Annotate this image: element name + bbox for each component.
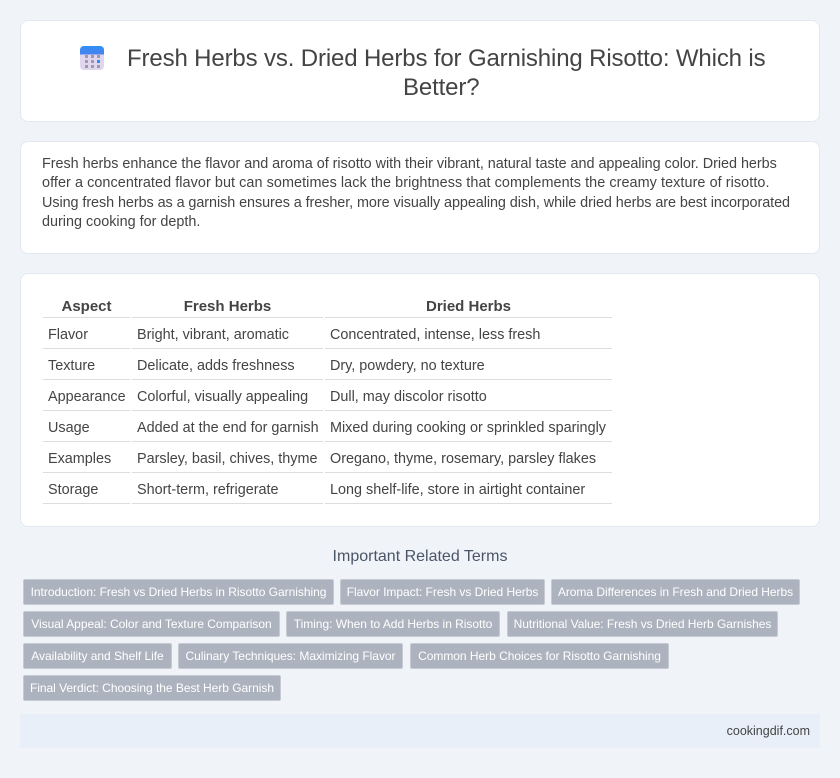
- table: fresh vs dried herbs: Dull, may discolor risotto: [330, 389, 487, 405]
- panel: introduction: [20, 141, 820, 254]
- table: fresh vs dried herbs: Dry, powdery, no texture: [330, 358, 485, 374]
- table: fresh vs dried herbs: Added at the end for garnish: [137, 420, 319, 436]
- text block: introduction: offer a concentrated flavor but can sometimes lack the brightness that complements the creamy texture of risotto.: [42, 175, 770, 191]
- tag list: related terms: Final Verdict: Choosing the Best Herb Garnish: [30, 681, 274, 695]
- table: fresh vs dried herbs: Examples: [48, 451, 111, 467]
- footer: source credit: cookingdif.com: [727, 724, 810, 738]
- table: fresh vs dried herbs: Fresh Herbs: [184, 298, 271, 315]
- table: fresh vs dried herbs: Aspect: [61, 298, 112, 315]
- table: fresh vs dried herbs: Parsley, basil, chives, thyme: [137, 451, 317, 467]
- table: fresh vs dried herbs: Short-term, refrigerate: [137, 482, 279, 498]
- table: fresh vs dried herbs: Storage: [48, 482, 98, 498]
- table: fresh vs dried herbs: Long shelf-life, store in airtight container: [330, 482, 585, 498]
- tag list: related terms: Aroma Differences in Fresh and Dried Herbs: [558, 585, 793, 599]
- table: fresh vs dried herbs: Mixed during cooking or sprinkled sparingly: [330, 420, 606, 436]
- tag list: related terms: [23, 579, 800, 701]
- tag list: related terms: Flavor Impact: Fresh vs Dried Herbs: [347, 585, 538, 599]
- footer bar: [20, 714, 820, 748]
- tag list: related terms: Visual Appeal: Color and Texture Comparison: [31, 617, 272, 631]
- tag list: related terms: Nutritional Value: Fresh vs Dried Herb Garnishes: [514, 617, 771, 631]
- title: Better?: [403, 74, 479, 101]
- table: fresh vs dried herbs: Delicate, adds freshness: [137, 358, 295, 374]
- text block: introduction: Using fresh herbs as a garnish ensures a fresher, more visually appealing dish, while dried herbs are best incorporated: [42, 195, 790, 211]
- tag list: related terms: Timing: When to Add Herbs in Risotto: [294, 617, 492, 631]
- panel: comparison table: [20, 273, 820, 527]
- text block: introduction: during cooking for depth.: [42, 214, 200, 230]
- table: fresh vs dried herbs: [43, 298, 612, 504]
- tag list: related terms: Culinary Techniques: Maximizing Flavor: [185, 649, 396, 663]
- table: fresh vs dried herbs: Usage: [48, 420, 90, 436]
- table: fresh vs dried herbs: Concentrated, intense, less fresh: [330, 327, 540, 343]
- tag list: related terms: Common Herb Choices for Risotto Garnishing: [418, 649, 661, 663]
- tag list: related terms: Introduction: Fresh vs Dried Herbs in Risotto Garnishing: [31, 585, 326, 599]
- text block: introduction: Fresh herbs enhance the flavor and aroma of risotto with their vibrant, natural taste and appealing color. Dried herbs: [42, 156, 777, 172]
- text block: introduction: [42, 156, 790, 230]
- title: [127, 45, 765, 101]
- table: fresh vs dried herbs: Dried Herbs: [426, 298, 511, 315]
- table: fresh vs dried herbs: Oregano, thyme, rosemary, parsley flakes: [330, 451, 596, 467]
- table: fresh vs dried herbs: Colorful, visually appealing: [137, 389, 308, 405]
- heading: important related terms: Important Related Terms: [333, 548, 507, 565]
- title: Fresh Herbs vs. Dried Herbs for Garnishing Risotto: Which is: [127, 45, 765, 72]
- icon: calendar: [80, 46, 104, 70]
- table: fresh vs dried herbs: Texture: [48, 358, 95, 374]
- panel: header: [20, 20, 820, 122]
- table: fresh vs dried herbs: Bright, vibrant, aromatic: [137, 327, 289, 343]
- table: fresh vs dried herbs: Appearance: [48, 389, 126, 405]
- table: fresh vs dried herbs: Flavor: [48, 327, 88, 343]
- tag list: related terms: Availability and Shelf Life: [31, 649, 164, 663]
